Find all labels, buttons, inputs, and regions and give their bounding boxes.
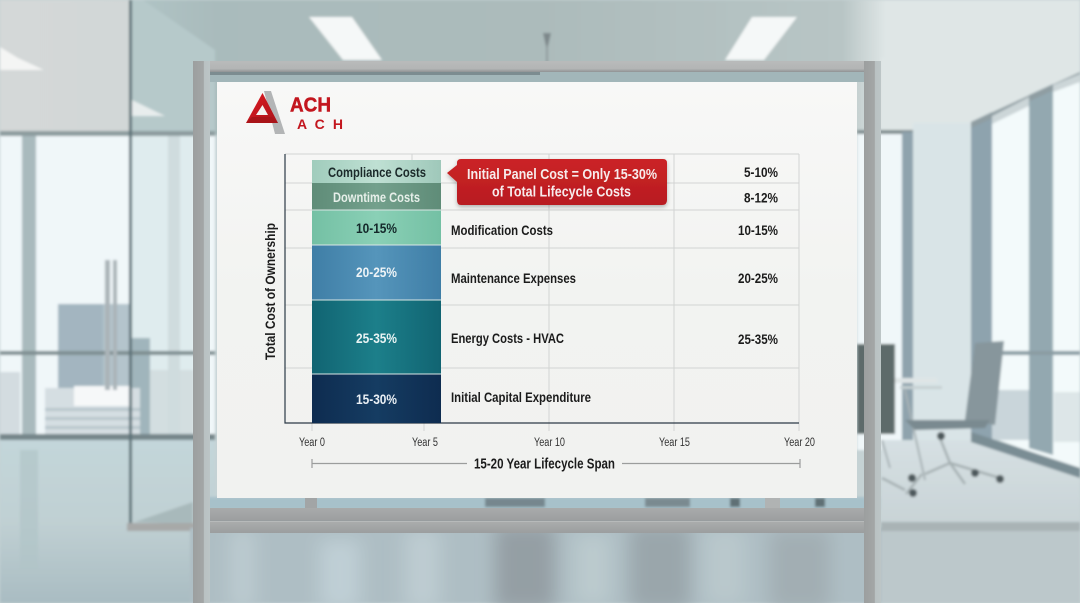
logo	[246, 91, 343, 134]
segment: maintenance	[312, 245, 441, 300]
city buildings	[58, 304, 103, 394]
callout: Initial Panel Cost = Only 15-30%	[467, 166, 657, 183]
x axis labels: Year 20	[784, 437, 815, 449]
gridlines	[285, 154, 799, 431]
x axis labels: Year 0	[299, 437, 325, 449]
right-side windows	[971, 72, 1080, 470]
chart	[262, 154, 815, 472]
segment: downtime	[312, 183, 441, 210]
percentage column: 20-25%	[738, 270, 778, 286]
cost labels: Modification Costs	[451, 222, 553, 238]
x axis labels: Year 5	[412, 437, 438, 449]
segment: modification: 10-15%	[356, 220, 397, 236]
segment: modification	[312, 210, 441, 245]
segment: energy	[312, 300, 441, 374]
cost labels: Initial Capital Expenditure	[451, 389, 591, 405]
whiteboard frame	[193, 61, 881, 603]
percentage column: 5-10%	[744, 164, 778, 180]
logo subtext: A C H	[297, 116, 343, 132]
floor right	[881, 440, 1080, 603]
mounting brackets	[305, 498, 317, 508]
x axis labels: Year 10	[534, 437, 565, 449]
cost labels: Energy Costs - HVAC	[451, 330, 564, 346]
y axis title: Total Cost of Ownership	[262, 223, 278, 360]
segment: compliance	[312, 160, 441, 183]
left mullions	[22, 135, 36, 440]
office chair	[965, 341, 1004, 425]
left windows	[0, 135, 215, 440]
lifecycle span	[312, 456, 800, 472]
lifecycle span: 15-20 Year Lifecycle Span	[474, 456, 615, 472]
board panel	[217, 82, 857, 498]
posts	[193, 61, 210, 603]
glass edge	[129, 0, 132, 525]
table	[895, 378, 937, 383]
dark screen	[857, 344, 895, 434]
ceiling lights	[0, 47, 44, 70]
floor middle	[190, 528, 890, 603]
percentage column	[738, 164, 778, 347]
segment: compliance: Compliance Costs	[328, 164, 426, 180]
right window and wall	[881, 58, 1080, 133]
frame inner gap	[210, 72, 864, 82]
cost labels	[451, 222, 591, 405]
segment: energy: 25-35%	[356, 330, 397, 346]
percentage column: 8-12%	[744, 190, 778, 206]
cost labels: Maintenance Expenses	[451, 270, 576, 286]
segment: capital	[312, 374, 441, 423]
x axis labels	[299, 437, 815, 449]
segment: maintenance: 20-25%	[356, 264, 397, 280]
logo text: ACH	[290, 94, 331, 116]
axes	[285, 154, 799, 423]
ceiling	[0, 0, 1080, 135]
rails	[193, 61, 881, 72]
percentage column: 25-35%	[738, 331, 778, 347]
percentage column: 10-15%	[738, 222, 778, 238]
x axis labels: Year 15	[659, 437, 690, 449]
segment: capital: 15-30%	[356, 391, 397, 407]
callout	[447, 159, 667, 205]
callout: of Total Lifecycle Costs	[492, 184, 631, 200]
logo mark	[246, 91, 285, 134]
stacked bar	[312, 160, 441, 423]
segment: downtime: Downtime Costs	[333, 189, 420, 205]
floor	[0, 440, 215, 603]
